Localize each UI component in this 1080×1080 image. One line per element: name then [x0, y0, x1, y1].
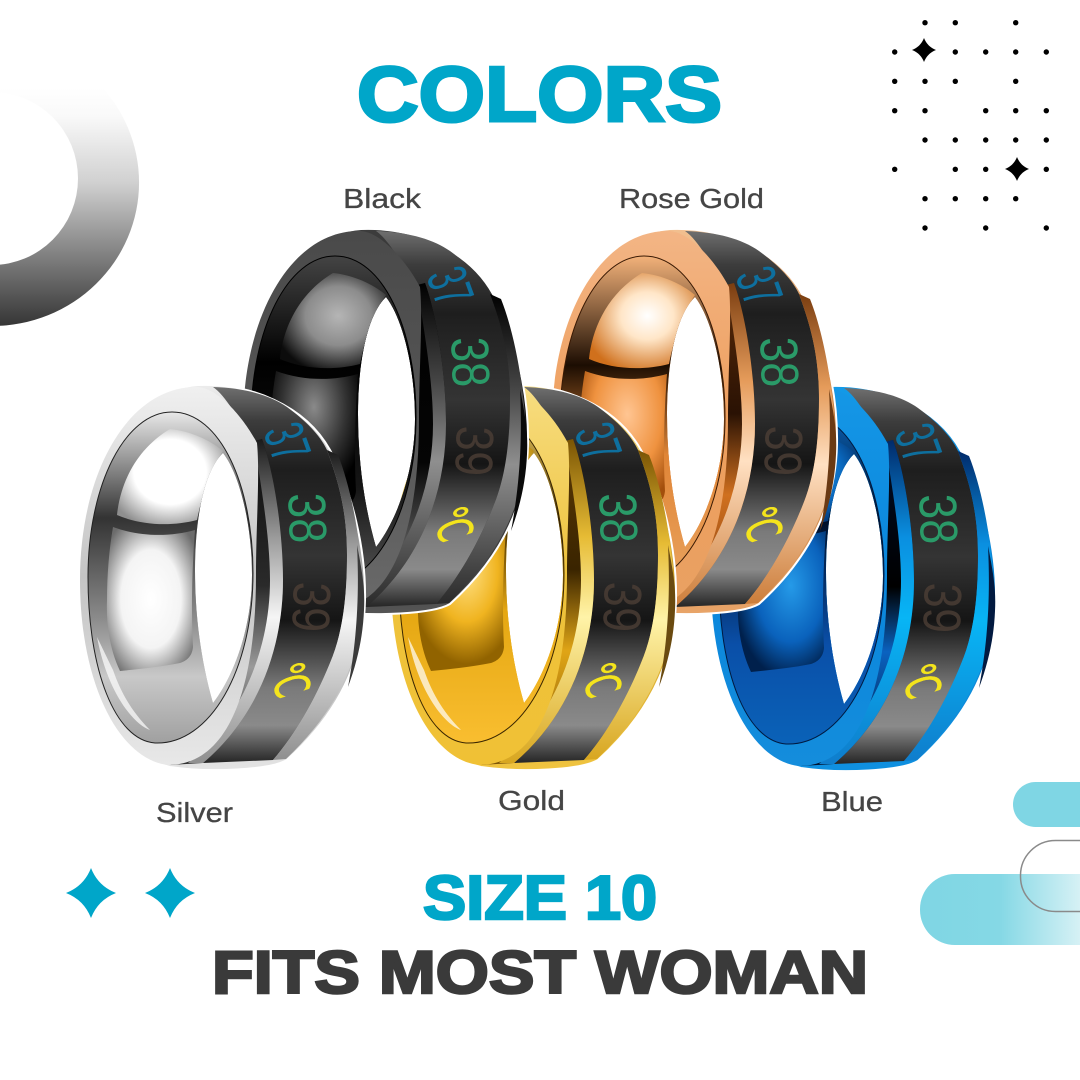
ring: gold: ℃ [568, 657, 631, 705]
heading: fit: FITS MOST WOMAN [212, 939, 868, 1006]
ring: gold [391, 385, 676, 770]
ring: gold: 37 [563, 414, 635, 470]
ring: rose gold [552, 229, 837, 614]
ring: blue: 39 [911, 582, 972, 634]
ring: silver: ℃ [257, 657, 320, 705]
dot grid with stars, top right [892, 20, 1049, 231]
decorative pills, right [920, 782, 1080, 945]
ring: gold: 38 [587, 492, 648, 544]
ring: rose gold: ℃ [729, 501, 792, 549]
ring: blue: ℃ [888, 658, 951, 706]
ring: black: ℃ [420, 501, 483, 549]
title: COLORS [357, 50, 722, 138]
ring: silver: 37 [252, 414, 324, 470]
heading: size: SIZE 10 [423, 864, 657, 933]
label: Rose Gold: Rose Gold [619, 183, 764, 214]
ring: rose gold: 38 [748, 336, 809, 388]
cyan sparkle icons [66, 868, 195, 918]
ring: black [243, 229, 528, 614]
label: Gold: Gold [498, 785, 565, 816]
ring: black: 37 [415, 258, 487, 314]
ring: silver: 39 [280, 581, 341, 633]
ring: black: 38 [439, 336, 500, 388]
ring: rose gold: 37 [724, 258, 796, 314]
ring: silver: 38 [276, 492, 337, 544]
ring: blue [711, 386, 996, 771]
ring: gold: 39 [591, 581, 652, 633]
ring: blue: 37 [883, 415, 955, 471]
label: Silver: Silver [156, 797, 233, 828]
ring: rose gold: 39 [752, 425, 813, 477]
ring: black: 39 [443, 425, 504, 477]
ring: blue: 38 [907, 493, 968, 545]
decorative gradient half ring, left [0, 120, 139, 326]
label: Black: Black [343, 183, 422, 214]
label: Blue: Blue [821, 786, 883, 817]
ring: silver [80, 385, 365, 770]
